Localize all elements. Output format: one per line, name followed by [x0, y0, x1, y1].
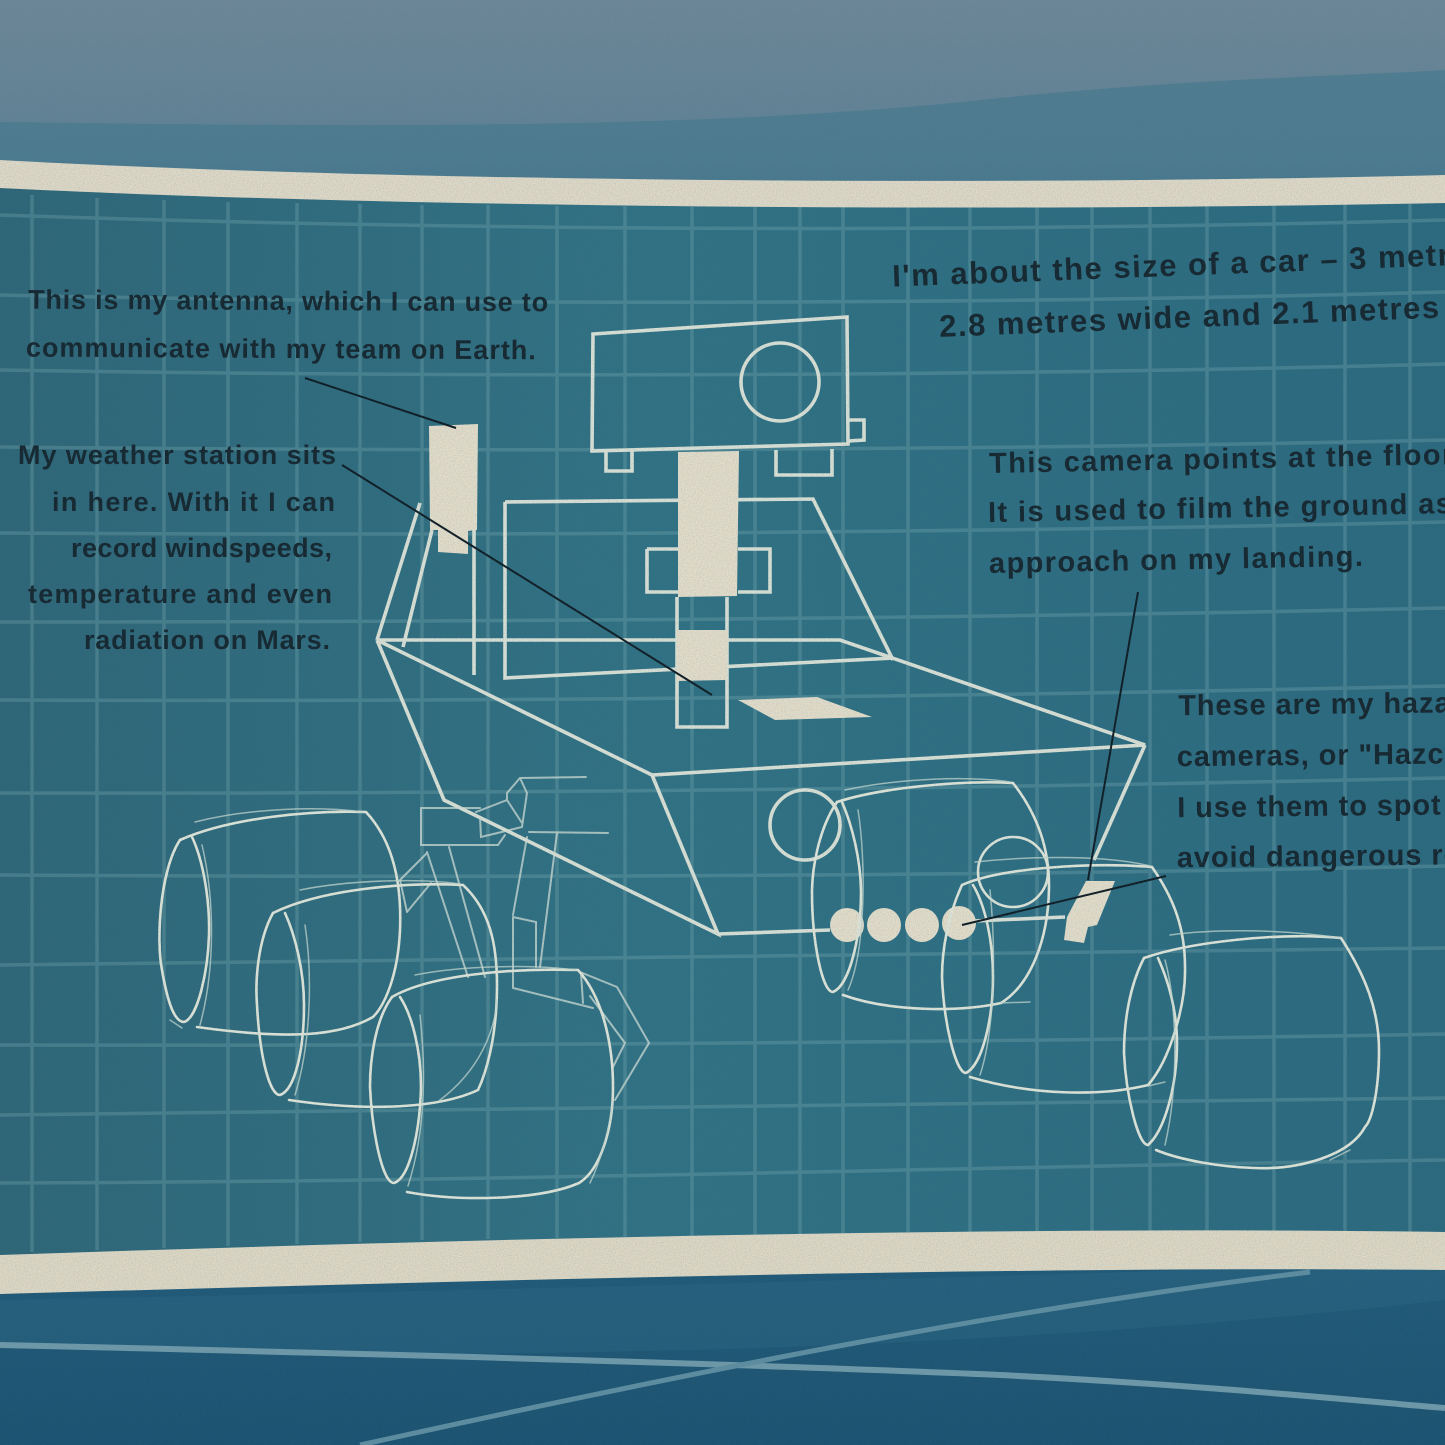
text: weather station: radiation on Mars. [84, 625, 330, 655]
text: weather station: temperature and even [28, 579, 332, 609]
wheels right [812, 782, 1379, 1168]
text: size of rover [892, 232, 1445, 346]
background: upper sky [0, 0, 1445, 220]
text: floor camera [987, 439, 1445, 580]
rover illustration [159, 317, 1379, 1198]
text: antenna: communicate with my team on Earth. [26, 333, 536, 365]
leader line: weather station [342, 465, 712, 695]
leader line: antenna [305, 378, 456, 428]
text: hazard cameras [1175, 687, 1445, 874]
weather box [677, 630, 728, 681]
camera head [592, 317, 864, 475]
text: antenna [26, 285, 548, 365]
cream band: bottom [0, 1230, 1445, 1294]
wheel sketch lines left [170, 809, 613, 1186]
suspension [400, 777, 649, 1100]
background: lower ground with lines [0, 1240, 1445, 1445]
leader line: hazard cameras [962, 876, 1166, 925]
text: weather station [18, 440, 336, 655]
floor camera block [1064, 881, 1115, 943]
leader line: floor camera [1088, 592, 1138, 880]
cream band: top [0, 160, 1445, 208]
text: weather station: record windspeeds, [71, 533, 332, 563]
wheel sketch lines right [845, 779, 1350, 1160]
text: floor camera: approach on my landing. [989, 541, 1365, 580]
chassis [377, 499, 1145, 934]
hazcam dots [830, 906, 976, 942]
text: weather station: in here. With it I can [52, 487, 335, 517]
text: antenna: This is my antenna, which I can use to [28, 285, 548, 317]
floor plate [738, 697, 872, 720]
antenna block [429, 424, 478, 554]
mast [678, 451, 739, 597]
wheels left [159, 812, 613, 1198]
text: weather station: My weather station sits [18, 440, 336, 470]
panel: blueprint background [0, 188, 1445, 1255]
